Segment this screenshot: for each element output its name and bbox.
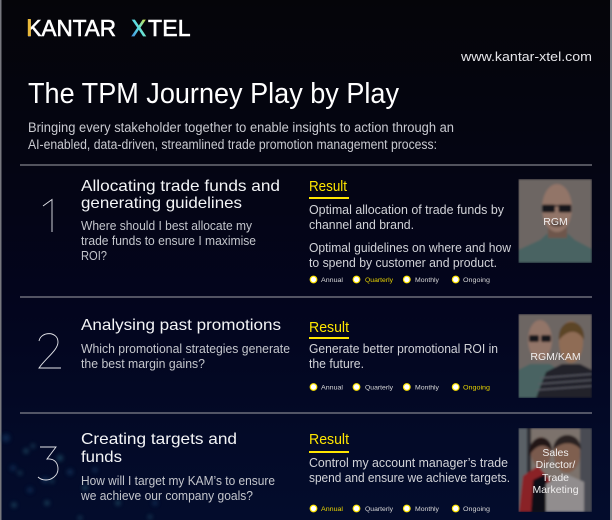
step 1 frequency legend: Monthly	[415, 277, 440, 284]
step 3 frequency legend: Quarterly	[365, 506, 394, 513]
panel: step 3	[20, 412, 592, 513]
step 1 result text	[309, 202, 512, 270]
step 3 heading: Creating targets and	[81, 431, 237, 448]
number 3	[38, 447, 58, 480]
step 1 question	[81, 219, 256, 263]
step 2 result heading: Result	[309, 319, 350, 336]
step 2 frequency legend: Annual	[321, 384, 344, 392]
step 1 frequency legend: Annual	[321, 277, 344, 284]
step 1 question: trade funds to ensure I maximise	[81, 234, 256, 248]
step 3 question: we achieve our company goals?	[80, 489, 253, 503]
logo: Kantar Xtel	[26, 15, 191, 41]
step 2 frequency legend	[310, 384, 490, 392]
step 2 question: the best margin gains?	[81, 357, 205, 371]
step 1 result heading: Result	[309, 178, 348, 195]
step 1 result text: Optimal guidelines on where and how	[309, 240, 512, 255]
panel: step 1	[20, 164, 592, 284]
step 2 question	[81, 342, 290, 371]
subtitle: Bringing every stakeholder together to enable insights to action through an	[28, 120, 454, 135]
step 3 heading	[81, 431, 237, 466]
step 1 heading: Allocating trade funds and	[81, 178, 280, 195]
step 1 frequency legend: Quarterly	[365, 277, 394, 284]
photo: Sales Director / Trade Marketing: Marketing	[532, 484, 579, 496]
logo: Kantar Xtel: X	[132, 15, 146, 41]
number 1	[43, 200, 52, 232]
photo: RGM/KAM	[518, 314, 592, 398]
step 2 frequency legend: Ongoing	[463, 384, 490, 392]
step 3 question: How will I target my KAM’s to ensure	[81, 474, 275, 488]
photo: RGM: RGM	[543, 216, 568, 228]
step 3 frequency legend: Ongoing	[463, 506, 490, 513]
photo: RGM/KAM: RGM/KAM	[530, 351, 581, 363]
step 1 result text: channel and brand.	[309, 217, 414, 232]
step 1 frequency legend: Ongoing	[463, 277, 490, 284]
step 3 frequency legend	[310, 505, 490, 513]
step 3 frequency legend: Annual	[321, 506, 344, 513]
step 2 frequency legend: Quarterly	[365, 384, 394, 392]
number 2	[39, 334, 61, 368]
step 3 question	[80, 474, 275, 503]
website url: www.kantar-xtel.com	[460, 49, 592, 64]
step 3 frequency legend: Monthly	[415, 506, 440, 513]
step 3 result text: spend and ensure we achieve targets.	[309, 470, 510, 485]
step 3 result text: Control my account manager’s trade	[309, 455, 508, 470]
subtitle	[28, 120, 454, 152]
step 1 question: Where should I best allocate my	[81, 219, 253, 233]
photo: RGM	[518, 179, 592, 263]
panel: step 2	[20, 296, 592, 398]
step 3 heading: funds	[81, 449, 122, 466]
subtitle: AI-enabled, data-driven, streamlined trade promotion management process:	[28, 137, 437, 152]
step 3 result heading: Result	[309, 431, 350, 448]
step 2 result text: the future.	[309, 356, 364, 371]
photo: Sales Director / Trade Marketing: Trade	[542, 472, 569, 484]
step 2 result text: Generate better promotional ROI in	[309, 341, 498, 356]
step 2 result text	[309, 341, 498, 371]
step 1 question: ROI?	[81, 249, 107, 263]
step 1 heading	[81, 178, 280, 212]
title: The TPM Journey Play by Play	[28, 78, 399, 110]
logo: Kantar Xtel: TEL	[148, 15, 191, 41]
step 1 heading: generating guidelines	[81, 195, 242, 212]
step 3 result text	[309, 455, 510, 485]
step 1 result text: to spend by customer and product.	[309, 255, 497, 270]
photo: Sales Director / Trade Marketing: Director/	[536, 459, 575, 471]
step 2 heading: Analysing past promotions	[81, 317, 281, 334]
photo: Sales Director / Trade Marketing	[518, 428, 592, 512]
logo: Kantar Xtel: KANTAR	[26, 15, 116, 41]
step 1 result text: Optimal allocation of trade funds by	[309, 202, 504, 217]
photo: Sales Director / Trade Marketing: Sales	[542, 447, 569, 459]
step 1 frequency legend	[310, 276, 490, 284]
step 2 frequency legend: Monthly	[415, 384, 440, 392]
step 2 question: Which promotional strategies generate	[81, 342, 290, 356]
